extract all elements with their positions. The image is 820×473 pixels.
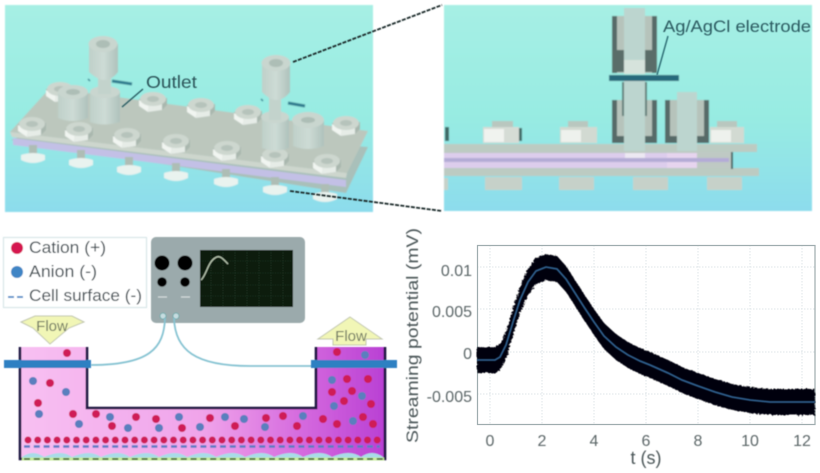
lower plate <box>11 125 368 193</box>
y axis ticks: 0.005 <box>432 304 472 321</box>
free anions <box>29 351 369 432</box>
plates and lavender channel <box>444 144 759 176</box>
label: Outlet: Outlet <box>146 72 197 92</box>
x axis ticks: 6 <box>642 433 651 450</box>
x axis ticks: 4 <box>590 433 599 450</box>
arrow: flow in <box>21 316 84 344</box>
x axis title: t (s) <box>630 448 662 468</box>
arrow: flow out <box>318 317 382 345</box>
plot grid <box>477 245 815 424</box>
bolts top <box>445 121 744 143</box>
meter screen <box>200 250 293 307</box>
bolts bottom <box>444 177 742 190</box>
zoom connector dashed lines <box>290 5 442 211</box>
second fitting <box>665 92 709 151</box>
y axis ticks <box>427 263 472 406</box>
electrodes <box>4 360 397 368</box>
plot frame <box>478 246 815 424</box>
panel: cross-section view of the cell <box>444 5 812 211</box>
mean signal line <box>477 267 815 402</box>
chart: streaming potential vs time <box>403 228 815 468</box>
cation layer <box>28 436 378 444</box>
arrow: flow in: Flow <box>36 318 68 335</box>
x axis ticks <box>486 433 811 450</box>
label: Ag/AgCl electrode <box>657 17 811 75</box>
arrow: flow out: Flow <box>335 328 367 345</box>
bottom nuts <box>21 145 337 202</box>
x axis ticks: 2 <box>538 433 547 450</box>
legend: Anion (-) <box>29 263 97 281</box>
panel: 3D flow cell device <box>5 5 373 212</box>
meter <box>151 237 305 323</box>
channel walls <box>20 347 385 459</box>
cell surface <box>22 453 384 459</box>
right vertical fitting <box>261 55 305 150</box>
x axis ticks: 12 <box>793 433 811 450</box>
label: Ag/AgCl electrode: Ag/AgCl electrode <box>663 17 811 36</box>
back fitting nuts <box>46 82 360 149</box>
x axis ticks: 10 <box>741 433 759 450</box>
wires <box>91 318 312 366</box>
free cations <box>34 348 377 432</box>
y axis ticks: -0.005 <box>427 389 472 406</box>
x axis ticks: 8 <box>694 433 703 450</box>
front nuts <box>18 117 341 174</box>
y axis ticks: 0 <box>463 346 472 363</box>
upper plate <box>10 88 368 178</box>
y axis title: Streaming potential (mV) <box>403 228 422 443</box>
x axis ticks: 0 <box>486 433 495 450</box>
legend <box>4 238 146 308</box>
y axis ticks: 0.01 <box>441 263 472 280</box>
legend: Cell surface (-) <box>29 287 142 305</box>
upper fitting <box>612 8 657 74</box>
fluidic channel with ions <box>4 347 397 459</box>
lower fitting <box>612 81 657 151</box>
left vertical fitting <box>88 36 132 124</box>
label: Outlet <box>122 72 197 107</box>
noisy signal band <box>477 254 815 415</box>
anion layer <box>24 445 380 448</box>
electrode <box>609 75 679 81</box>
legend: Cation (+) <box>29 239 106 257</box>
